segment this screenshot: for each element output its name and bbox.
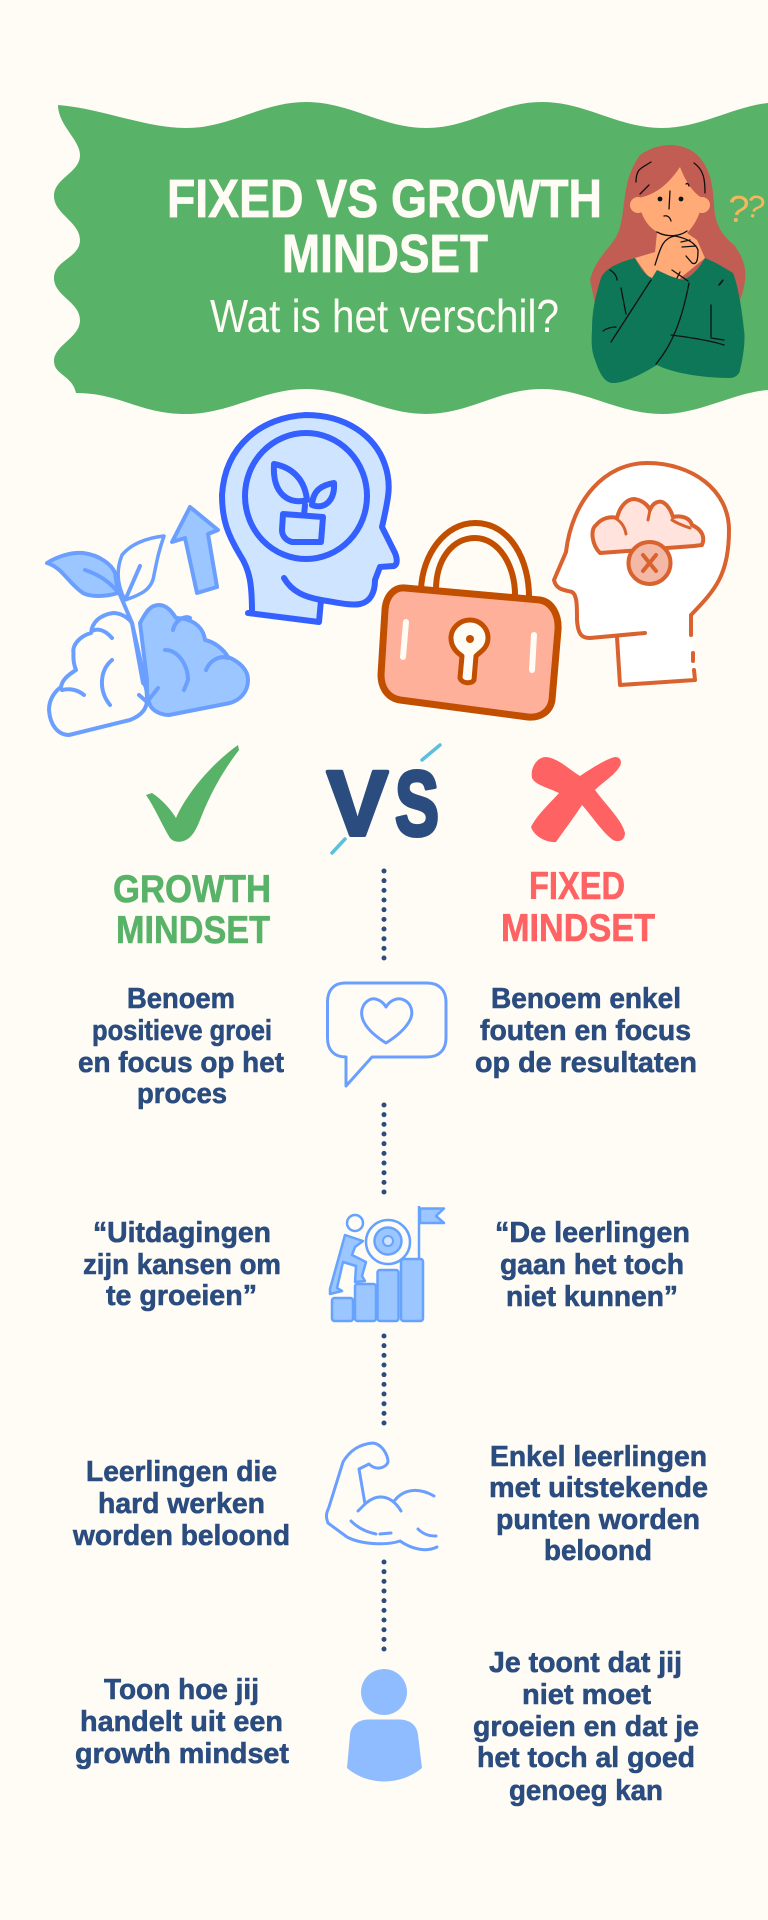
row 2 growth text: te groeien”: [106, 1280, 257, 1312]
row 1 growth text: [78, 983, 284, 1110]
icon: growth head: [222, 415, 397, 622]
row 4 fixed text: Je toont dat jij: [489, 1647, 682, 1679]
row 4 growth text: growth mindset: [75, 1738, 289, 1770]
title: [167, 169, 602, 284]
icon: green check: [146, 745, 239, 842]
fixed mindset heading: [501, 865, 655, 950]
row 2 fixed text: [495, 1217, 690, 1313]
vs heading: [327, 745, 440, 855]
row 3 growth text: [72, 1456, 290, 1552]
title: MINDSET: [282, 224, 488, 284]
row 3 fixed text: [489, 1441, 708, 1567]
row 2 growth text: “Uitdagingen: [93, 1217, 271, 1249]
row 1 fixed text: op de resultaten: [475, 1047, 697, 1079]
row 1 growth text: Benoem: [127, 983, 235, 1015]
vs heading: S: [395, 753, 439, 855]
row 4 fixed text: groeien en dat je: [473, 1711, 699, 1743]
vs heading: V: [327, 753, 388, 855]
row 2 growth text: zijn kansen om: [83, 1249, 281, 1281]
growth mindset heading: [113, 868, 271, 952]
icon: climbing to target and flag: [330, 1206, 444, 1321]
icon: growing brain: [47, 507, 248, 735]
subtitle: Wat is het verschil?: [210, 290, 559, 342]
row 4 growth text: [75, 1674, 289, 1770]
row 1 growth text: proces: [137, 1078, 227, 1110]
fixed mindset heading: FIXED: [529, 865, 625, 908]
row 4 fixed text: genoeg kan: [509, 1775, 663, 1807]
icon: person: [347, 1669, 422, 1782]
row 3 growth text: Leerlingen die: [86, 1456, 277, 1488]
row 4 growth text: handelt uit een: [80, 1706, 283, 1738]
row 2 growth text: [83, 1217, 281, 1312]
row 1 fixed text: fouten en focus: [480, 1015, 691, 1047]
row 4 fixed text: [473, 1647, 699, 1807]
row 1 fixed text: [475, 983, 697, 1079]
row 1 fixed text: Benoem enkel: [491, 983, 681, 1015]
row 4 fixed text: niet moet: [522, 1679, 651, 1711]
icon: thinking woman: [590, 145, 768, 383]
row 3 fixed text: Enkel leerlingen: [490, 1441, 707, 1473]
row 3 growth text: hard werken: [98, 1488, 265, 1520]
row 3 fixed text: beloond: [544, 1535, 652, 1567]
row 3 fixed text: punten worden: [496, 1504, 700, 1536]
banner wavy background: [54, 102, 768, 414]
row 4 fixed text: het toch al goed: [477, 1742, 695, 1774]
icon: speech bubble with heart: [328, 983, 446, 1086]
icon: padlock: [381, 523, 558, 717]
icon: fixed head: [554, 463, 729, 685]
row 3 fixed text: met uitstekende: [489, 1472, 708, 1504]
banner: [54, 102, 768, 414]
row 2 fixed text: gaan het toch: [500, 1249, 684, 1281]
row 3 growth text: worden beloond: [72, 1520, 290, 1552]
icon: red cross: [531, 757, 625, 842]
fixed mindset heading: MINDSET: [501, 907, 655, 950]
row 2 fixed text: “De leerlingen: [495, 1217, 690, 1249]
growth mindset heading: GROWTH: [113, 868, 271, 911]
row 4 growth text: Toon hoe jij: [104, 1674, 259, 1706]
row 1 growth text: en focus op het: [78, 1047, 284, 1079]
row 1 growth text: positieve groei: [92, 1015, 272, 1047]
growth mindset heading: MINDSET: [116, 909, 270, 952]
row 2 fixed text: niet kunnen”: [506, 1281, 678, 1313]
icon: thinking woman: ?: [742, 187, 768, 226]
icon: flexed arm: [326, 1443, 437, 1550]
icon: thinking woman: ?: [724, 188, 751, 232]
title: FIXED VS GROWTH: [167, 169, 602, 229]
